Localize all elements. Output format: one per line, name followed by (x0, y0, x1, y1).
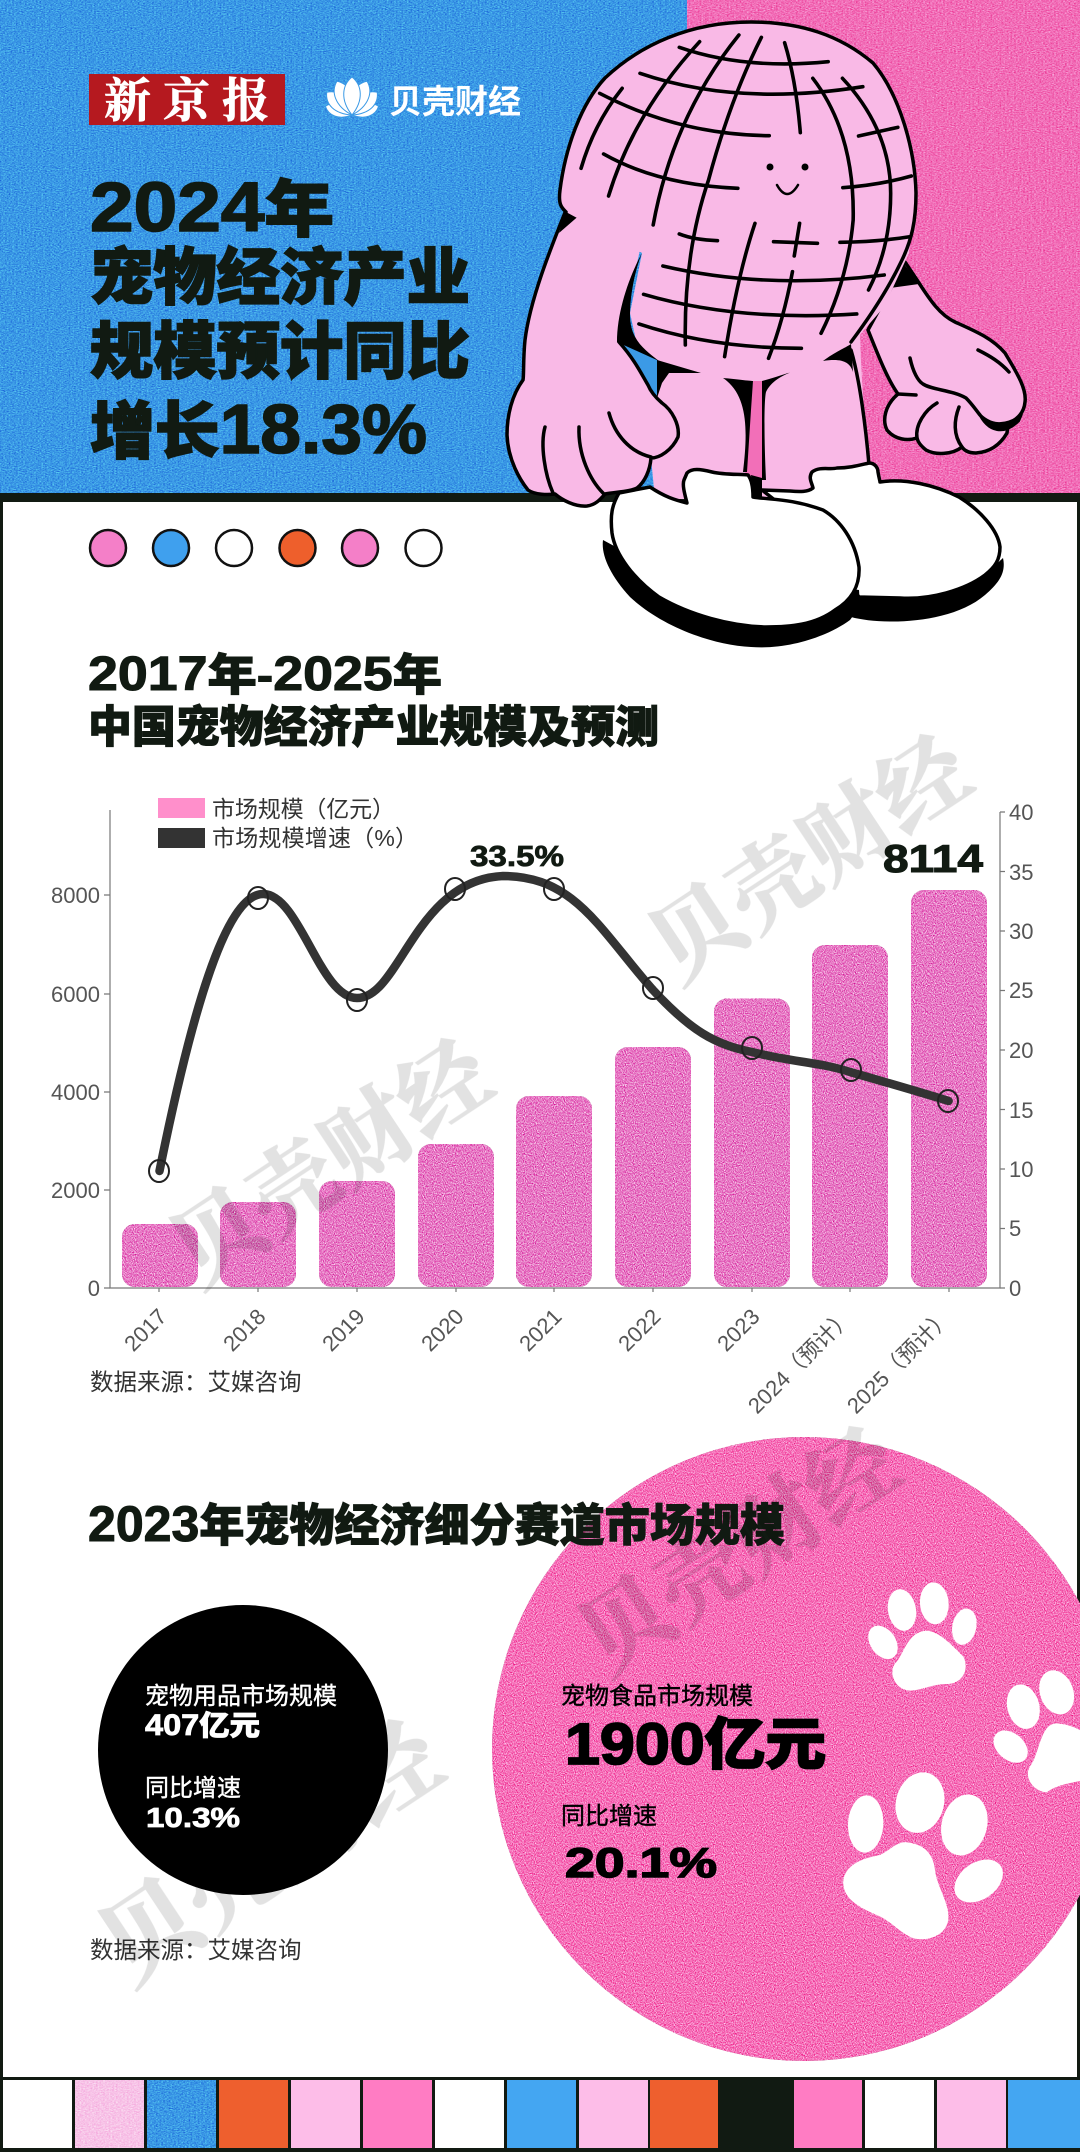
character illustration: globe-headed pink figure (507, 22, 1025, 647)
face (766, 164, 808, 194)
x axis labels (119, 1304, 957, 1418)
pet supplies text (145, 1683, 337, 1833)
x axis labels: 2020 (416, 1304, 469, 1356)
x axis labels: 2025（预计） (842, 1304, 957, 1418)
pet supplies text: 10.3% (146, 1802, 240, 1833)
pet food text: 20.1% (565, 1839, 717, 1886)
legend: 市场规模增速（%） (212, 825, 418, 851)
pet supplies text: 同比增速 (145, 1775, 241, 1802)
head grid lines (581, 35, 911, 358)
heading: market size chart (88, 648, 659, 752)
character legs (640, 335, 869, 499)
left axis labels: 8000 (51, 883, 100, 908)
watermarks: 贝壳财经 (82, 1701, 463, 2004)
heading: market size chart: 2017 年-2025 年 (88, 648, 442, 701)
right axis labels: 40 (1009, 800, 1033, 825)
x axis labels: 2023 (712, 1304, 765, 1356)
title: 规模预计同比 (90, 318, 470, 387)
left axis labels: 4000 (51, 1080, 100, 1105)
logo: 新京报: 新 (104, 64, 151, 131)
logo: 贝壳财经: 贝壳财经 (389, 83, 521, 120)
right axis labels: 15 (1009, 1098, 1033, 1123)
left axis labels: 6000 (51, 982, 100, 1007)
right axis labels: 0 (1009, 1276, 1021, 1301)
character left arm and hand (507, 210, 678, 506)
left axis labels: 2000 (51, 1178, 100, 1203)
watermarks: 贝壳财经 (154, 1022, 512, 1305)
x axis labels: 2021 (514, 1304, 567, 1356)
right axis labels: 5 (1009, 1216, 1021, 1241)
footer colour strip (0, 2077, 1080, 2152)
legend: 市场规模（亿元） (212, 796, 395, 822)
pet food text: 1900亿元 (565, 1712, 826, 1777)
logo: 新京报: 京 (163, 64, 211, 131)
front shoe (603, 470, 859, 647)
watermarks: 贝壳财经 (633, 718, 991, 1001)
callout: 8114: 8114 (883, 838, 983, 881)
pet supplies text: 407亿元 (145, 1709, 260, 1742)
right page border (1077, 500, 1080, 2080)
title: 宠物经济产业 (90, 244, 470, 313)
bubble: pet supplies (98, 1605, 388, 1895)
title: 增长18.3% (90, 390, 427, 468)
back shoe (762, 463, 1004, 622)
x axis labels: 2019 (317, 1304, 370, 1356)
source note: chart: 数据来源：艾媒咨询 (90, 1369, 302, 1395)
heading: segment market size: 2023年宠物经济细分赛道市场规模 (88, 1496, 785, 1552)
header panel: blue (0, 0, 688, 494)
left axis labels (51, 883, 100, 1301)
legend (158, 796, 418, 851)
watermarks (82, 718, 991, 2004)
x axis labels: 2018 (218, 1304, 271, 1356)
character right arm and hand (868, 260, 1025, 453)
logo: 贝壳财经 (321, 77, 521, 121)
bubble: pet food (492, 1437, 1080, 2061)
right axis labels: 10 (1009, 1157, 1033, 1182)
left axis labels: 0 (88, 1276, 100, 1301)
right axis labels: 25 (1009, 978, 1033, 1003)
character head (559, 22, 916, 398)
paw prints (843, 1581, 1080, 1939)
header divider band (0, 493, 1080, 502)
pet food text (561, 1683, 826, 1886)
x axis labels: 2017 (119, 1304, 172, 1356)
x axis labels: 2022 (613, 1304, 666, 1356)
watermarks: 贝壳财经 (562, 1410, 920, 1693)
logo: 新京报 (89, 64, 285, 131)
title (90, 168, 470, 468)
pet food text: 同比增速 (561, 1803, 657, 1830)
bars (122, 890, 987, 1287)
line markers (149, 878, 958, 1182)
left page border (0, 500, 3, 2080)
right axis labels: 35 (1009, 860, 1033, 885)
combo chart: market size bars and growth line (51, 796, 1033, 1418)
callout: 33.5%: 33.5% (470, 841, 564, 873)
pet supplies text: 宠物用品市场规模 (145, 1683, 337, 1710)
right axis labels (1009, 800, 1033, 1301)
source note: segments: 数据来源：艾媒咨询 (90, 1937, 302, 1963)
heading: market size chart: 中国宠物经济产业规模及预测 (88, 703, 659, 752)
chart axes (104, 810, 1005, 1292)
pet food text: 宠物食品市场规模 (561, 1683, 753, 1710)
logo: 新京报: 报 (222, 64, 269, 131)
decorative dots row (90, 530, 442, 566)
right axis labels: 30 (1009, 919, 1033, 944)
right axis labels: 20 (1009, 1038, 1033, 1063)
x axis labels: 2024（预计） (743, 1304, 858, 1418)
blue gap beside the body (619, 342, 659, 397)
header panel: pink (687, 0, 1080, 494)
growth line (160, 876, 949, 1171)
title: 2024 年 (90, 168, 334, 246)
